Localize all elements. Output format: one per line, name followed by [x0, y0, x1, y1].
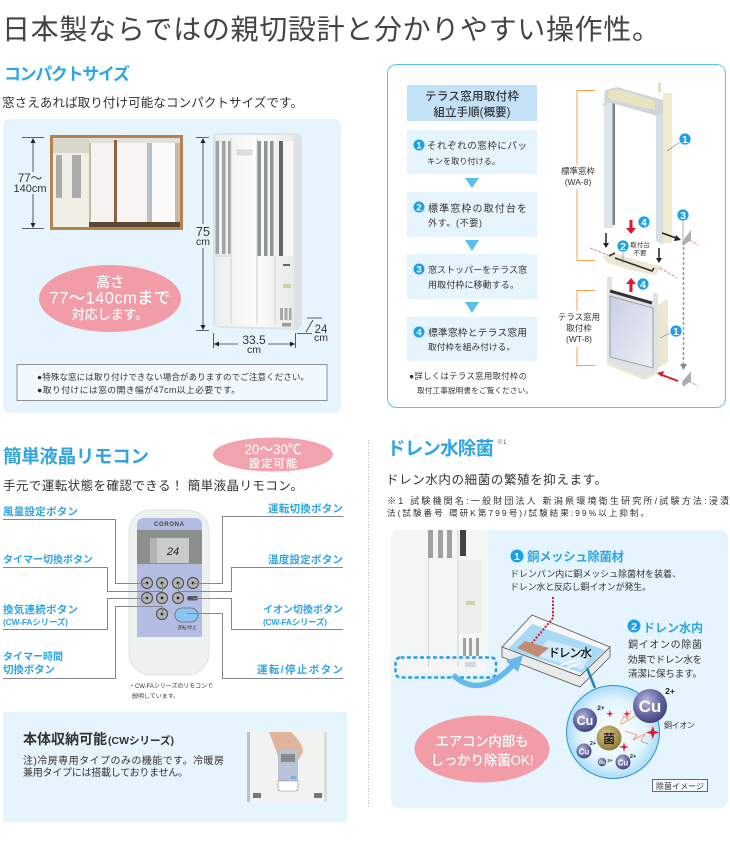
procedure heading: テラス窓用取付枠 [425, 89, 520, 103]
callout numbers on diagram: 4 [641, 217, 647, 229]
text: drain intro: ドレン水内の細菌の繁殖を抑えます。 [386, 472, 607, 487]
dimension: unit height: 75 [196, 225, 210, 239]
dimension: unit width [214, 333, 296, 356]
callout: sterilization ok: エアコン内部も [436, 734, 528, 749]
dimension: unit height [196, 138, 210, 330]
arrow down 1 [465, 178, 479, 188]
ion illustration [566, 686, 695, 778]
storage text: 兼用タイプには搭載しておりません。 [23, 766, 188, 779]
bracket: terrace frame: (WT-8) [566, 334, 592, 344]
ion illustration: 2+ [607, 758, 613, 763]
callout numbers on diagram [617, 133, 691, 338]
diagram: stoppers and arrows [603, 220, 698, 387]
ion illustration: Cu [577, 714, 593, 728]
bracket: terrace frame [558, 290, 600, 366]
ion illustration: Cu [579, 748, 589, 756]
callout: height range [39, 265, 181, 332]
heading: drain water: 2 [631, 621, 637, 633]
procedure heading: 組立手順(概要) [434, 105, 511, 119]
leader lines [3, 516, 343, 678]
callout numbers on diagram: 4 [640, 279, 646, 291]
remote control body: 24 [166, 546, 179, 558]
heading: copper mesh: 1 [514, 551, 520, 563]
text: drain water [628, 638, 702, 680]
ion illustration: Cu [639, 697, 661, 716]
notes box: ●取り付けには窓の開き幅が47cm以上必要です。 [37, 384, 240, 395]
bracket: standard frame: 標準窓枠 [561, 166, 595, 176]
remote control body: CORONA [154, 522, 185, 528]
procedure note: ●詳しくはテラス窓用取付枠の [409, 371, 527, 381]
storage text [23, 754, 224, 779]
dimension: unit depth: 24 [315, 324, 328, 336]
remote note: ・CW-FAシリーズのリモコンで [129, 682, 213, 690]
procedure heading [407, 85, 537, 121]
remote note: 説明しています。 [132, 692, 179, 700]
label: sterilization image [652, 780, 708, 792]
text: copper mesh: ドレン水と反応し銅イオンが発生。 [510, 581, 651, 592]
label: ion: イオン切換ボタン [263, 603, 343, 616]
text: drain water: 効果でドレン水を [628, 654, 702, 666]
dimension: window height: 140cm [13, 183, 47, 195]
label: sterilization image: 除菌イメージ [656, 781, 704, 791]
label: fan: 風量設定ボタン [3, 506, 78, 518]
ion illustration: Cu [618, 758, 628, 768]
bracket: standard frame [560, 90, 595, 260]
callout: height range: 対応します。 [72, 307, 148, 322]
text: copper mesh [510, 568, 681, 592]
dimension: unit depth: cm [314, 332, 328, 344]
ion illustration: 2+ [665, 686, 675, 696]
label: mode: 運転切換ボタン [268, 502, 343, 515]
step 1: それぞれの窓枠にパッ [427, 140, 527, 152]
dimension: unit height: cm [196, 236, 210, 248]
callout numbers on diagram: 取付台 [630, 240, 650, 249]
label: temperature: 温度設定ボタン [268, 553, 343, 566]
ion illustration: 2+ [590, 741, 596, 747]
callout numbers on diagram: 2 [620, 241, 626, 253]
arrow down 3 [465, 302, 479, 313]
dimension: window height: 77〜 [18, 173, 43, 185]
unit close-up [391, 530, 488, 673]
connector [587, 668, 595, 688]
procedure note: 取付工事説明書をご覧ください。 [417, 385, 533, 395]
step 3: 窓ストッパーをテラス窓 [428, 265, 527, 275]
text: footnote: ※1 試験機関名:一般財団法人 新潟県環境衛生研究所/試験方法:浸漬 [387, 495, 729, 506]
callout: height range: 高さ [96, 274, 124, 290]
remote control with labels [3, 502, 343, 700]
heading: copper mesh: 銅メッシュ除菌材 [527, 549, 624, 564]
drain pan [502, 615, 610, 687]
step 4: 4 [416, 328, 422, 338]
ion illustration: 菌 [603, 731, 615, 746]
ion illustration: 2+ [630, 754, 636, 760]
heading: drain water sterilization: ドレン水除菌 [387, 438, 494, 459]
diagram: terrace frame WT-8 [607, 277, 668, 380]
step 3 [407, 254, 537, 299]
heading: drain water: ドレン水内 [643, 620, 703, 635]
curved arrow [453, 655, 523, 685]
step 2: 2 [416, 202, 422, 214]
callout: sterilization ok: しっかり除菌OK! [430, 753, 534, 768]
text: compact size intro: 窓さえあれば取り付け可能なコンパクトサイズです。 [2, 95, 303, 110]
heading: remote control: 簡単液晶リモコン [3, 446, 149, 467]
panel: terrace window frame procedure [388, 64, 726, 408]
step 1: 1 [416, 140, 422, 152]
callout numbers on diagram: 1 [682, 134, 688, 146]
label: ion: (CW-FAシリーズ) [263, 617, 327, 627]
ion illustration: Cu [599, 760, 605, 765]
drain pan: ドレン水 [548, 645, 592, 660]
callout: sterilization ok [414, 716, 550, 782]
step 3: 3 [416, 264, 422, 276]
dashed highlight [396, 658, 496, 678]
step 2: 外す。(不要) [428, 217, 482, 228]
dimension: unit depth [297, 318, 328, 344]
label: timer time: 切換ボタン [3, 663, 55, 676]
label: start stop: 運転/停止ボタン [257, 663, 343, 676]
storage heading: 本体収納可能(CWシリーズ) [23, 731, 174, 747]
remote control body [129, 510, 209, 675]
bracket: terrace frame: 取付枠 [566, 323, 592, 333]
label: ion [263, 603, 343, 627]
window photo [50, 135, 183, 230]
panel: drain [391, 530, 728, 808]
notes box [17, 364, 327, 400]
title: 日本製ならではの親切設計と分かりやすい操作性。 [2, 14, 660, 45]
step 4 [407, 317, 537, 361]
panel: storage [3, 712, 347, 822]
callout: temperature range [213, 438, 333, 472]
step 1: キンを取り付ける。 [427, 156, 500, 166]
text: copper mesh: ドレンパン内に銅メッシュ除菌材を装着、 [510, 568, 681, 579]
storage text: 注)冷房専用タイプのみの機能です。冷暖房 [23, 754, 224, 767]
air conditioner unit [213, 133, 302, 330]
callout: temperature range: 20〜30℃ [244, 442, 302, 457]
ion illustration: 銅イオン [664, 720, 695, 730]
heading: compact size: コンパクトサイズ [4, 64, 130, 84]
step 4: 取付枠を組み付ける。 [428, 341, 515, 352]
procedure note [409, 371, 533, 395]
callout numbers on diagram: 3 [680, 210, 686, 222]
callout numbers on diagram: 1 [673, 326, 679, 338]
step 2: 標準窓枠の取付台を [428, 202, 527, 215]
label: ventilation [3, 603, 78, 627]
remote control body: 運転/停止 [177, 624, 197, 631]
ion illustration: 2+ [597, 705, 605, 712]
diagram: standard frame WA-8 [602, 83, 672, 245]
storage photo [247, 732, 327, 802]
step 4: 標準窓枠とテラス窓用 [428, 326, 527, 339]
red dotted line [532, 597, 553, 643]
dimension: window height [13, 138, 47, 228]
text: footnote [387, 495, 729, 518]
step 3: 用取付枠に移動する。 [428, 279, 519, 290]
bracket: standard frame: (WA-8) [565, 177, 591, 187]
remote note [129, 682, 213, 700]
text: remote intro: 手元で運転状態を確認できる！ 簡単液晶リモコン。 [3, 478, 303, 493]
notes box: ●特殊な窓には取り付けできない場合がありますのでご注意ください。 [37, 372, 309, 382]
label: timer switch: タイマー切換ボタン [3, 553, 93, 566]
divider [368, 440, 370, 808]
text: footnote: 法(試験番号 環研K第799号)/試験結果:99%以上抑制。 [387, 508, 649, 518]
text: drain water: 清潔に保ちます。 [628, 668, 702, 680]
label: timer time [3, 650, 63, 676]
callout: height range: 77〜140cmまで [50, 290, 170, 308]
heading: drain water sterilization: ※1 [497, 439, 507, 446]
callout: temperature range: 設定可能 [249, 456, 297, 470]
step 1 [407, 130, 537, 174]
bracket: terrace frame: テラス窓用 [558, 312, 600, 322]
dimension: unit width: cm [247, 344, 261, 356]
text: drain water: 銅イオンの除菌 [628, 638, 702, 651]
label: ventilation: (CW-FAシリーズ) [3, 617, 68, 627]
diagram: base plate [590, 248, 677, 278]
callout numbers on diagram: 不要 [634, 249, 647, 257]
label: ventilation: 換気連続ボタン [3, 603, 78, 616]
dimension: unit width: 33.5 [242, 333, 266, 347]
arrow down 2 [465, 240, 479, 251]
label: timer time: タイマー時間 [3, 650, 63, 663]
panel: compact size [3, 119, 341, 413]
step 2 [407, 192, 537, 237]
